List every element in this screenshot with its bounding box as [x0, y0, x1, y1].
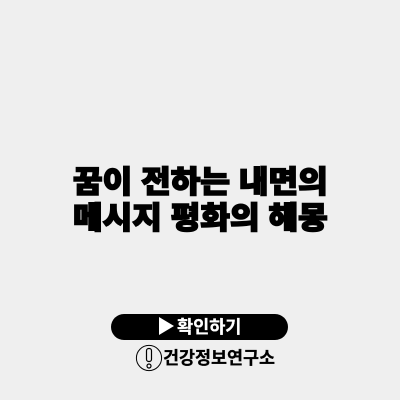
button: confirm [111, 314, 288, 340]
brand: health information institute [136, 344, 275, 372]
title: 꿈이 전하는 내면의 [73, 165, 328, 199]
button label: 확인하기 [177, 317, 241, 337]
icon: exclamation circle [136, 344, 162, 372]
brand name: 건강정보연구소 [163, 348, 275, 368]
icon: play triangle [159, 317, 174, 335]
title: 메시지 평화의 해몽 [73, 200, 328, 235]
title [73, 165, 328, 235]
